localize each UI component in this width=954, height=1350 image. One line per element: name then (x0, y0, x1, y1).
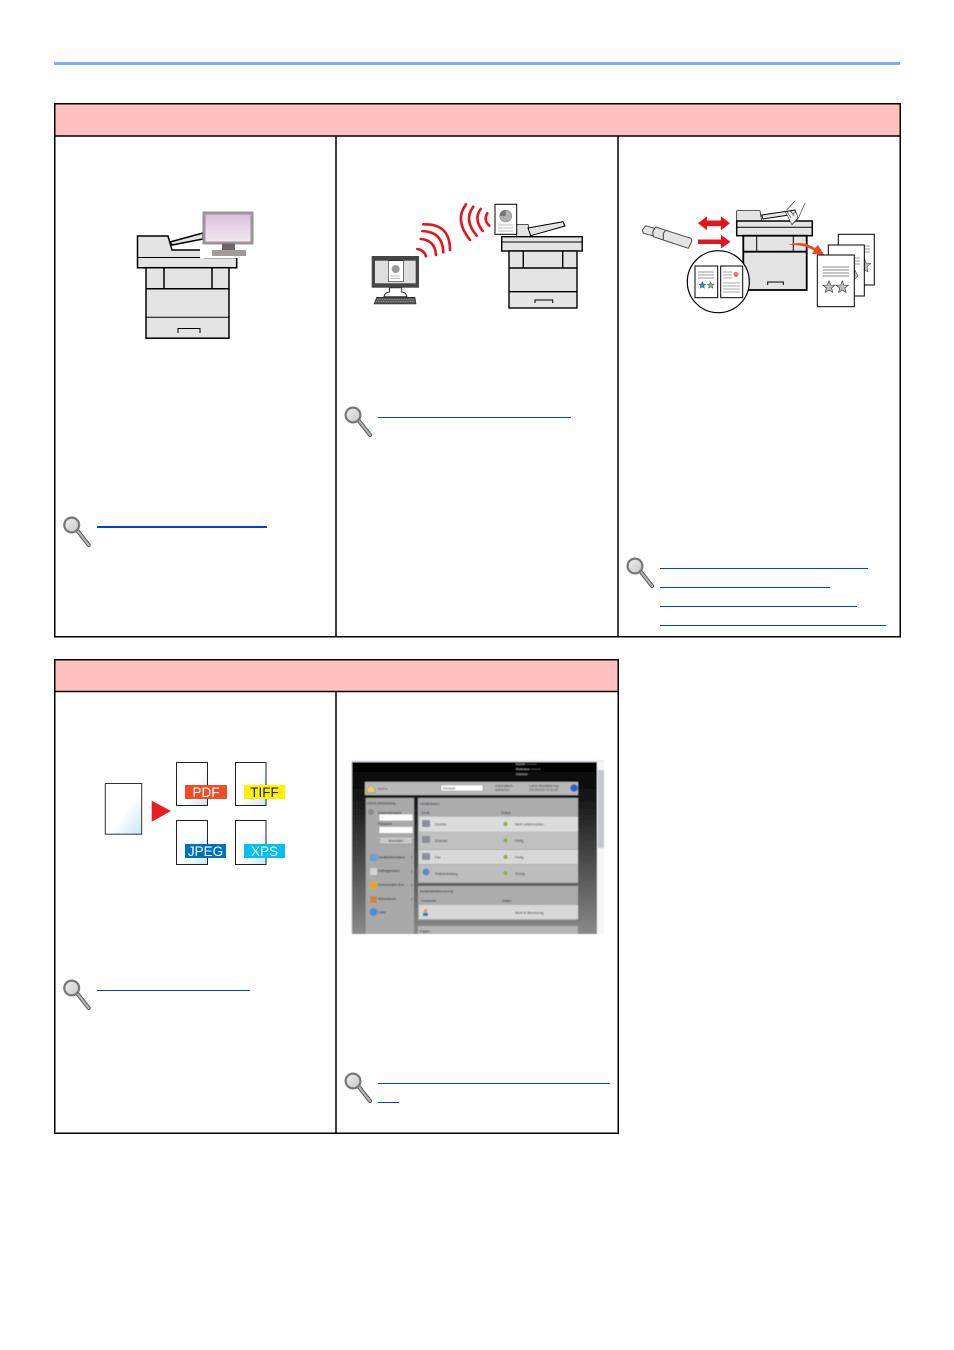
header info (516, 762, 540, 776)
output: JPEG (176, 820, 226, 864)
table: upper three-column panel (54, 104, 901, 637)
consumables panel (418, 886, 578, 920)
device status panel: Ready (515, 872, 525, 876)
output: XPS: XPS (251, 844, 278, 859)
printer (502, 222, 582, 308)
reference: panel 1 link (64, 518, 267, 545)
USB stick (642, 226, 692, 248)
toolbar: Letzte Aktualisierung: (529, 784, 559, 788)
device status panel: Drucker (435, 822, 448, 826)
icon: USB memory printing and scanning (642, 201, 874, 313)
wireless waves (417, 204, 489, 256)
toolbar: 2013/11/15 10:10:42 (529, 788, 558, 792)
arrow: two-way transfer (698, 216, 730, 230)
icon: scan to file formats (105, 762, 285, 864)
header info: Modell: ---------- (516, 762, 536, 766)
arrow: orange output (788, 243, 824, 254)
device status panel: Status (501, 811, 511, 815)
navigation column: Anwendername (378, 811, 402, 815)
header info: Hostname: --------- (516, 767, 540, 771)
magnified documents circle (687, 251, 749, 313)
device status panel: Fertig (515, 839, 524, 843)
printer (737, 210, 812, 290)
consumables panel: Bedarfsfeldbenutzung (420, 890, 453, 894)
toolbar: Automatisch- (495, 784, 514, 788)
icon: printer with monitor panel (138, 213, 252, 338)
icon: wireless printing from PC to printer (372, 204, 582, 308)
reference: panel 3 links (628, 559, 886, 626)
navigation column: Links (378, 910, 386, 914)
consumables panel: Anwender (421, 899, 437, 903)
toolbar (365, 782, 578, 795)
navigation column: Anmelden (388, 839, 404, 843)
navigation column: Geräteinformation (378, 856, 405, 860)
output: XPS (236, 820, 285, 864)
consumables panel: Nicht in Benutzung (515, 911, 544, 915)
computer (372, 256, 419, 304)
arrow: one-way to printer (698, 235, 730, 248)
navigation column: Dokumenten-Box (378, 883, 405, 887)
hand on scanner (786, 201, 805, 225)
output: TIFF: TIFF (250, 785, 279, 800)
navigation column (366, 798, 414, 934)
consumables panel: Status (502, 899, 512, 903)
source document (105, 784, 142, 834)
top rule (54, 62, 900, 65)
reference: panel 2 link (346, 408, 571, 435)
toolbar: aufrischen (495, 788, 510, 792)
toolbar: Home (378, 787, 388, 791)
output: PDF: PDF (192, 785, 220, 800)
output: PDF (176, 762, 227, 806)
reference: panel 4 link (64, 981, 250, 1008)
device status panel: Nicht unterbrochen... (515, 822, 547, 826)
output: JPEG: JPEG (188, 844, 223, 859)
header bar: upper table (55, 104, 900, 136)
device status panel: Gerät (421, 811, 430, 815)
device status panel (418, 798, 578, 883)
arrow: red triangle (152, 801, 171, 822)
navigation column: Passwort (378, 822, 392, 826)
device status panel: Scanner (435, 839, 448, 843)
output document stack (817, 234, 874, 307)
device status panel: Fertig (515, 856, 524, 860)
device status panel: Fax (435, 856, 441, 860)
paper panel (418, 926, 578, 934)
printed document (495, 204, 517, 234)
paper panel: Papier (420, 930, 431, 934)
output: TIFF (236, 762, 285, 806)
reference: panel 5 links (346, 1074, 610, 1103)
toolbar: Deutsch (443, 786, 456, 790)
header info: Standort: (516, 772, 528, 776)
header bar: lower table (55, 660, 618, 691)
device status panel: Statusmeldung (435, 872, 458, 876)
navigation column: Auftragsstatus (378, 869, 400, 873)
navigation column: Admin Anmeldung (367, 802, 395, 806)
table: lower two-column panel (54, 660, 619, 1134)
navigation column: Adressbuch (378, 897, 396, 901)
screenshot: device status web page (351, 760, 604, 934)
device status panel: Gerätestatus (420, 802, 440, 806)
